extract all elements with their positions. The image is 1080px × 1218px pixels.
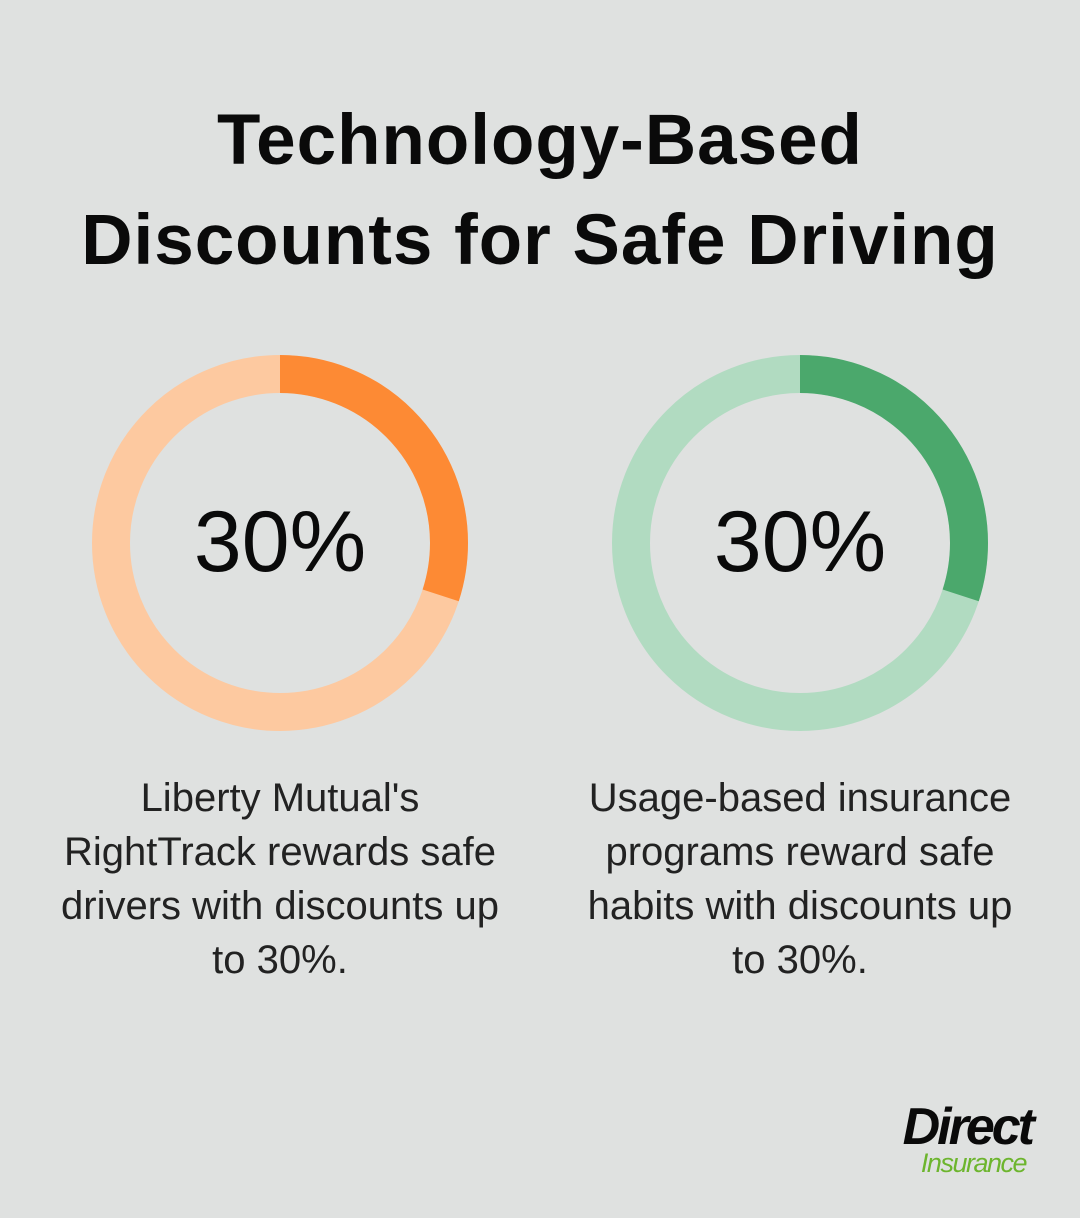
title: Technology-Based: [217, 101, 863, 180]
logo: Direct: [903, 1098, 1032, 1156]
text: right description: to 30%.: [732, 938, 868, 982]
text: left description: drivers with discounts up: [61, 884, 499, 928]
text: left description: to 30%.: [212, 938, 348, 982]
logo: [903, 1098, 1037, 1178]
text: right description: habits with discounts up: [588, 884, 1012, 928]
title: [81, 101, 999, 280]
text: right description: [588, 776, 1012, 982]
text: left description: RightTrack rewards safe: [64, 830, 496, 874]
text: right description: Usage-based insurance: [589, 776, 1011, 820]
text: right description: programs reward safe: [605, 830, 995, 874]
chart: left donut: 30%: [194, 494, 366, 590]
text: left description: Liberty Mutual's: [141, 776, 419, 820]
chart: right donut: 30%: [714, 494, 886, 590]
title: Discounts for Safe Driving: [81, 201, 999, 280]
chart: right donut: [612, 355, 988, 731]
text: left description: [61, 776, 499, 982]
logo: Insurance: [921, 1148, 1026, 1178]
chart: left donut: [92, 355, 468, 731]
